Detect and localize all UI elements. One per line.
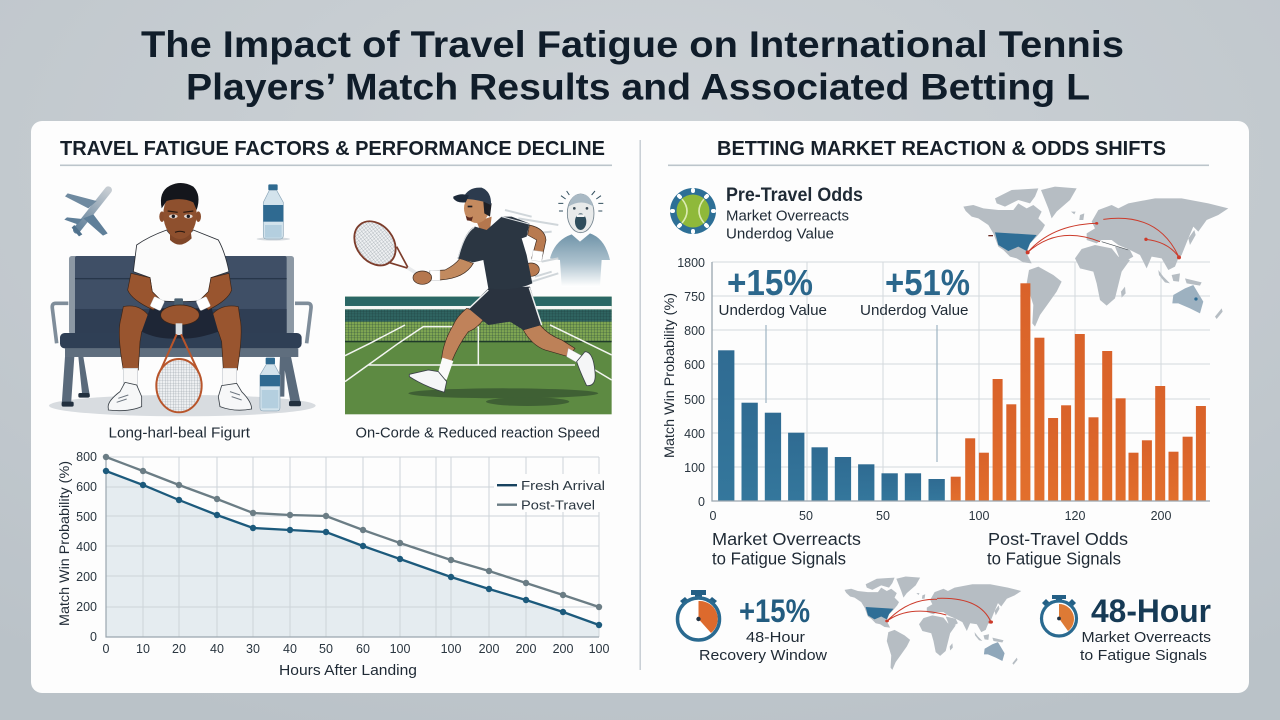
- caption: on-court: On-Corde & Reduced reaction Speed: [356, 424, 600, 442]
- racket: [156, 323, 202, 412]
- stat: +15% recovery: [699, 593, 827, 664]
- stat: 48-hour: 48-Hour: [1091, 593, 1211, 629]
- line chart: win probability after landing: 200: [553, 642, 573, 656]
- icon: tennis chip: [670, 188, 716, 234]
- line chart: win probability after landing: 200: [516, 642, 536, 656]
- panel: travel fatigue factors: [49, 137, 612, 679]
- pre-travel text: Pre-Travel Odds: [726, 184, 863, 206]
- y axis title: Match Win Probability (%): [662, 293, 677, 458]
- axis ticks: 500: [76, 510, 97, 524]
- stat: 48-hour: [1080, 593, 1211, 664]
- axis ticks: 800: [76, 450, 97, 464]
- fan: [550, 191, 610, 287]
- line chart: win probability after landing: 50: [319, 642, 333, 656]
- icon: stopwatch left: [678, 590, 720, 640]
- bar chart: 100: [969, 509, 989, 523]
- label: post-travel odds: to Fatigue Signals: [987, 548, 1121, 568]
- axis ticks: 800: [684, 324, 705, 338]
- bar chart: 0: [710, 509, 717, 523]
- legend: Post-Travel: [521, 498, 595, 512]
- illustration: on-court player: [345, 188, 612, 414]
- axis ticks: 400: [76, 540, 97, 554]
- callouts: Underdog Value: [860, 302, 968, 319]
- line chart: win probability after landing: 20: [172, 642, 186, 656]
- icon: water bottle bottom: [260, 358, 280, 411]
- axis ticks: [76, 450, 97, 644]
- bench: [52, 256, 311, 407]
- axis ticks: 400: [684, 427, 705, 441]
- label: post-travel odds: [987, 529, 1128, 568]
- illustration: fatigued player on airport bench: [49, 183, 316, 416]
- player seated: [108, 183, 252, 411]
- stat: 48-hour: to Fatigue Signals: [1080, 647, 1207, 664]
- line chart: win probability after landing: 200: [479, 642, 499, 656]
- series: post-travel: [103, 454, 602, 610]
- title: Players’ Match Results and Associated Betting L: [186, 66, 1090, 108]
- pre-travel text: Underdog Value: [726, 226, 834, 242]
- bar chart: [662, 187, 1228, 523]
- stat: +15% recovery: 48-Hour: [746, 629, 805, 646]
- line chart: win probability after landing: 40: [210, 642, 224, 656]
- line chart: win probability after landing: 100: [390, 642, 410, 656]
- icon: airplane: [64, 190, 108, 236]
- line chart: win probability after landing: 0: [103, 642, 110, 656]
- title: [141, 24, 1124, 108]
- callouts: +15%: [727, 262, 813, 303]
- running player: [409, 188, 595, 392]
- line chart: win probability after landing: 60: [356, 642, 370, 656]
- heading: travel fatigue factors: TRAVEL FATIGUE FACTORS & PERFORMANCE DECLINE: [60, 137, 605, 160]
- callouts: [718, 262, 970, 462]
- axis ticks: 600: [684, 358, 705, 372]
- title: The Impact of Travel Fatigue on International Tennis: [141, 24, 1124, 65]
- world map bottom: [845, 577, 1021, 670]
- axis ticks: 500: [684, 393, 705, 407]
- line chart: win probability after landing: 40: [283, 642, 297, 656]
- label: market overreacts: Market Overreacts: [712, 529, 861, 549]
- bar chart: 50: [876, 509, 890, 523]
- divider: [640, 140, 641, 670]
- line chart: win probability after landing: 100: [589, 642, 609, 656]
- pre-travel text: Market Overreacts: [726, 208, 849, 224]
- world map top: [963, 187, 1228, 327]
- axis ticks: 750: [684, 290, 705, 304]
- label: post-travel odds: Post-Travel Odds: [988, 529, 1128, 549]
- axis ticks: 0: [698, 495, 705, 509]
- bar chart: 200: [1151, 509, 1171, 523]
- heading: betting market: BETTING MARKET REACTION & ODDS SHIFTS: [717, 137, 1166, 160]
- orange bars: post-travel: [951, 283, 1206, 501]
- caption: long-haul: Long-harl-beal Figurt: [108, 424, 251, 442]
- pre-travel text: [726, 184, 863, 242]
- y axis title: Match Win Probability (%): [57, 461, 72, 626]
- line chart: win probability after landing: [57, 450, 609, 679]
- label: market overreacts: [712, 529, 861, 568]
- court: [345, 297, 612, 414]
- icon: water bottle top: [257, 184, 290, 241]
- axis ticks: 1800: [677, 256, 705, 270]
- speed lines: [505, 210, 558, 282]
- callouts: +51%: [885, 262, 970, 303]
- x axis title: Hours After Landing: [279, 662, 417, 679]
- axis ticks: 200: [76, 570, 97, 584]
- callouts: Underdog Value: [718, 302, 827, 319]
- stat: 48-hour: Market Overreacts: [1082, 629, 1211, 646]
- panel: betting market reaction: [662, 137, 1228, 670]
- label: market overreacts: to Fatigue Signals: [712, 548, 846, 568]
- bar chart: 120: [1065, 509, 1085, 523]
- axis ticks: 200: [76, 600, 97, 614]
- axis ticks: [677, 256, 705, 509]
- panel: main card: [31, 121, 1249, 693]
- series: fresh arrival: [103, 468, 602, 628]
- axis ticks: 100: [684, 461, 705, 475]
- bar chart: 50: [799, 509, 813, 523]
- stat: +15% recovery: Recovery Window: [699, 647, 827, 664]
- axis ticks: 600: [76, 480, 97, 494]
- axis ticks: 0: [90, 630, 97, 644]
- legend: Fresh Arrival: [521, 478, 605, 493]
- racket right: [346, 213, 418, 274]
- blue bars: pre-travel: [718, 350, 945, 501]
- line chart: win probability after landing: 10: [136, 642, 150, 656]
- icon: stopwatch right: [1042, 595, 1076, 636]
- line chart: win probability after landing: 100: [441, 642, 461, 656]
- line chart: win probability after landing: 30: [246, 642, 260, 656]
- stat: +15% recovery: +15%: [739, 593, 810, 629]
- legend: [494, 474, 606, 512]
